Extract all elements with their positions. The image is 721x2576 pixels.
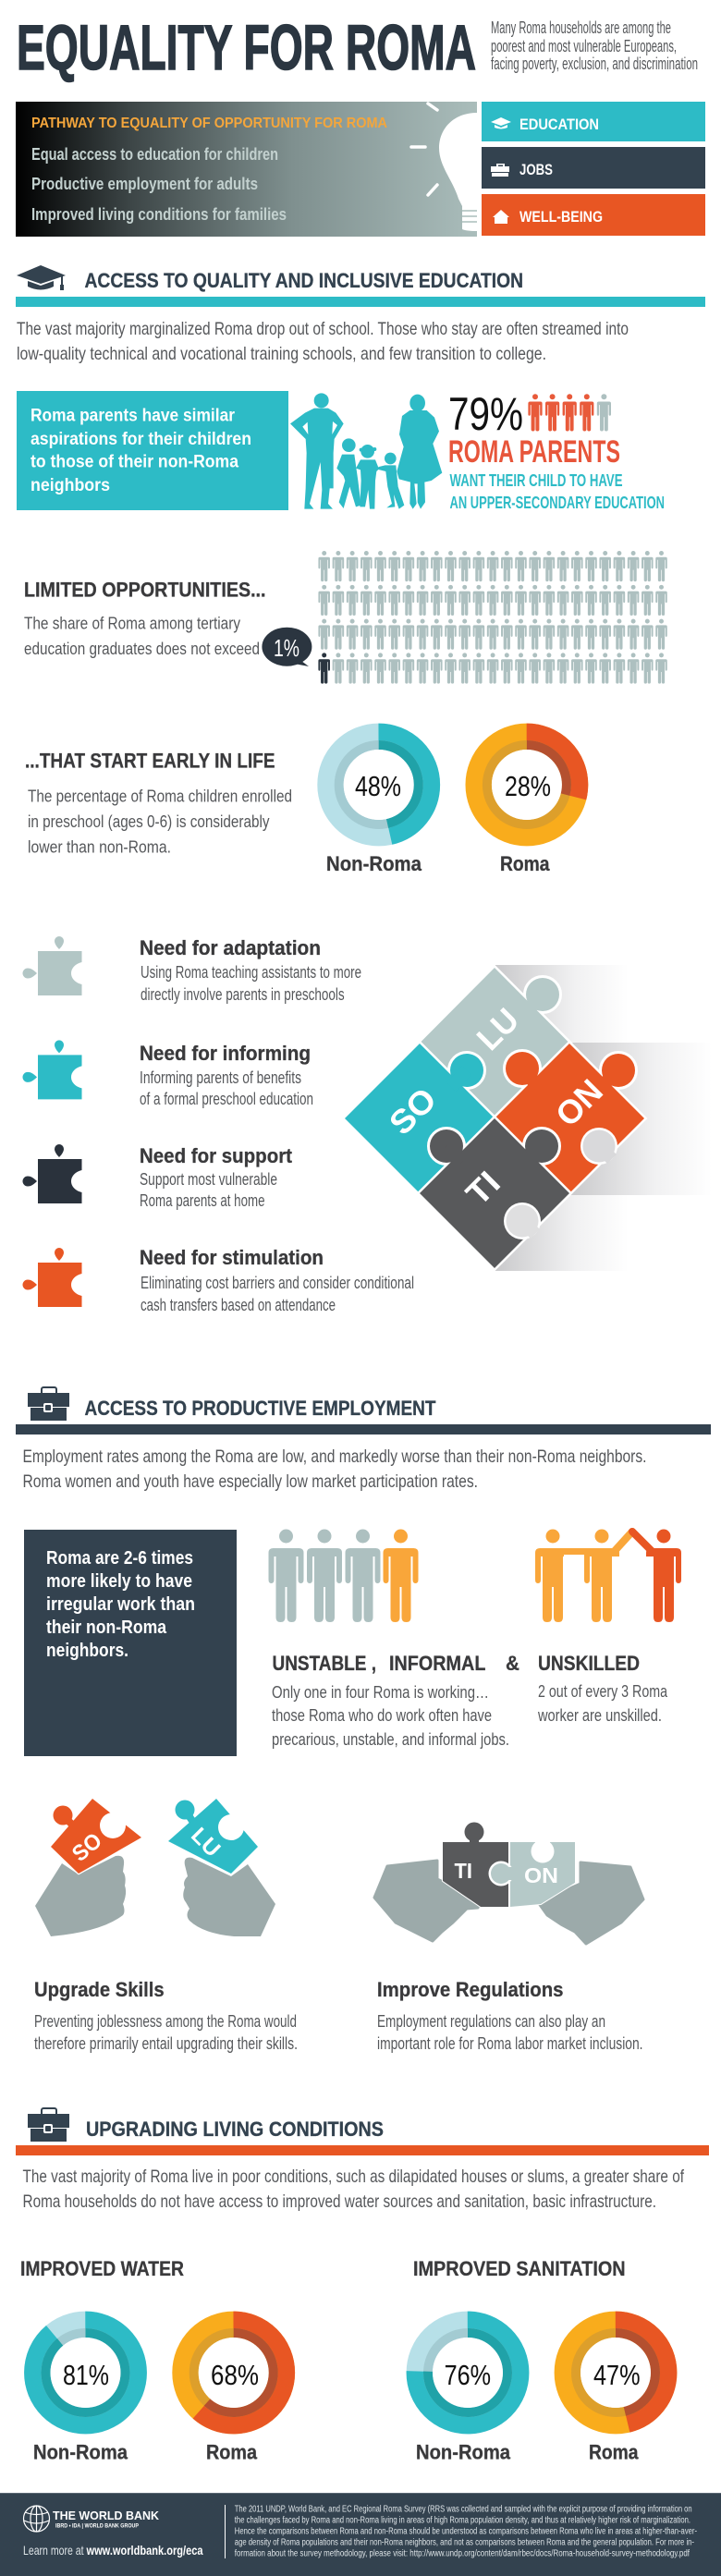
callout: 1%: 1%: [274, 634, 299, 662]
employment intro text: [22, 1447, 647, 1492]
text: tertiary share: [24, 614, 260, 658]
icon: hand holding LU piece: LU: [186, 1823, 226, 1862]
icon: world bank globe: [24, 2506, 50, 2532]
donut chart: water non-roma 81%: [37, 2325, 134, 2421]
learn more link: Learn more at: [23, 2543, 84, 2558]
text: unstable: [272, 1683, 509, 1749]
text: preschool: lower than non-Roma.: [28, 837, 171, 856]
text: preschool: in preschool (ages 0-6) is considerably: [28, 812, 270, 831]
banner list: Equal access to education for children: [31, 145, 278, 164]
icon: hand holding SO piece: [35, 1799, 141, 1936]
footer: [0, 2493, 721, 2576]
icon: hands joining TI and ON pieces: TI: [455, 1859, 472, 1883]
footnote: [235, 2505, 697, 2559]
icon: hands joining TI and ON pieces: ON: [524, 1863, 558, 1887]
text: tertiary share: education graduates does not exceed: [24, 640, 260, 658]
labels: donut groups: Roma: [206, 2441, 258, 2464]
callout: 1%: [262, 628, 312, 666]
item: need for adaptation: Using Roma teaching assistants to more: [141, 963, 361, 982]
icon: briefcase: [28, 1387, 69, 1421]
icon: hands joining TI and ON pieces: [374, 1823, 643, 1944]
button: jobs: JOBS: [519, 161, 553, 178]
text: tertiary share: The share of Roma among tertiary: [24, 614, 240, 632]
icon: house: [493, 210, 509, 224]
puzzle piece: ON: [495, 1044, 644, 1193]
text: preschool: The percentage of Roma children enrolled: [28, 787, 292, 806]
world bank logo text: IBRD • IDA | WORLD BANK GROUP: [55, 2523, 140, 2529]
puzzle: solution diamond: [345, 965, 712, 1271]
living conditions intro text: [22, 2167, 684, 2212]
icon: people 4 of 5: [528, 394, 611, 431]
stat: 79% roma parents: WANT THEIR CHILD TO HAVE: [449, 470, 623, 490]
puzzle piece: SO: [345, 1044, 495, 1193]
stat: 79% roma parents: [448, 388, 665, 512]
block: improve regulations: [377, 1978, 643, 2053]
section header: employment: [16, 1387, 711, 1435]
block: upgrade skills: [34, 1978, 298, 2053]
intro text: [491, 18, 698, 73]
puzzle piece: TI: TI: [458, 1164, 507, 1213]
icon: hand holding LU piece: [168, 1799, 275, 1936]
puzzle piece: LU: [420, 968, 569, 1118]
section header: living conditions: [16, 2108, 709, 2155]
icon: family silhouette: [290, 393, 442, 509]
icon: lightbulb: [411, 104, 477, 231]
item: need for adaptation: directly involve parents in preschools: [141, 985, 345, 1004]
donut chart: sanitation non-roma 76%: 76%: [445, 2359, 491, 2391]
block: upgrade skills: Upgrade Skills: [34, 1978, 165, 2001]
button: education: [482, 102, 705, 141]
donut chart: roma 28%: [479, 737, 575, 833]
labels: donut groups: Non-Roma: [416, 2441, 511, 2464]
text: unskilled: 2 out of every 3 Roma: [538, 1682, 668, 1701]
text: unskilled: [537, 1682, 668, 1725]
puzzle piece: TI: [420, 1118, 569, 1268]
item: need for support: Support most vulnerable: [140, 1170, 277, 1189]
panel: pathway banner: [16, 102, 477, 237]
donut chart: non-roma 48%: 48%: [355, 770, 401, 802]
label: non-roma: Non-Roma: [326, 852, 422, 875]
donut chart: sanitation non-roma 76%: [420, 2325, 516, 2421]
donut chart: water non-roma 81%: 81%: [63, 2359, 109, 2391]
item: need for support: Roma parents at home: [140, 1191, 264, 1210]
education intro text: [17, 319, 629, 364]
puzzle piece: LU: LU: [470, 1001, 526, 1057]
panel: irregular work: [24, 1530, 237, 1756]
item: need for informing: Need for informing: [140, 1042, 311, 1065]
button: education: EDUCATION: [519, 116, 599, 133]
learn more link: www.worldbank.org/eca: [86, 2543, 203, 2558]
education intro text: low-quality technical and vocational training schools, and few transition to college.: [17, 344, 546, 364]
block: improve regulations: Improve Regulations: [377, 1978, 564, 2001]
donut chart: non-roma 48%: [331, 737, 427, 833]
labels: donut groups: Non-Roma: [33, 2441, 128, 2464]
heading: start early: ...THAT START EARLY IN LIFE: [25, 749, 275, 773]
item: need for support: Need for support: [140, 1144, 293, 1167]
button: jobs: [482, 147, 705, 189]
banner list: Improved living conditions for families: [31, 205, 287, 224]
block: upgrade skills: Preventing joblessness among the Roma would: [34, 2012, 297, 2031]
panel: aspirations: neighbors: [31, 476, 110, 495]
icon: briefcase: [491, 164, 509, 177]
world bank logo text: [53, 2509, 160, 2529]
icon: hand holding SO piece: SO: [67, 1828, 107, 1867]
item: need for stimulation: Eliminating cost barriers and consider conditional: [141, 1274, 414, 1292]
item: need for informing: of a formal preschool education: [140, 1090, 313, 1108]
donut chart: water roma 68%: [185, 2325, 282, 2421]
labels: donut groups: [33, 2441, 639, 2464]
labels: unstable informal unskilled: INFORMAL: [389, 1652, 485, 1675]
button: well-being: [482, 194, 705, 236]
chart: people grid: [318, 551, 667, 684]
item: need for stimulation: Need for stimulation: [140, 1246, 324, 1269]
text: unstable: Only one in four Roma is working…: [272, 1683, 489, 1702]
panel: irregular work: irregular work than: [46, 1594, 195, 1615]
item: need for support: [22, 1144, 293, 1210]
panel: irregular work: Roma are 2-6 times: [46, 1548, 193, 1569]
item: need for stimulation: [22, 1246, 414, 1314]
item: need for adaptation: [22, 936, 361, 1004]
block: upgrade skills: therefore primarily entail upgrading their skills.: [34, 2034, 298, 2053]
labels: donut groups: Roma: [589, 2441, 639, 2464]
stat: 79% roma parents: 79%: [448, 388, 523, 440]
labels: unstable informal unskilled: UNSTABLE ,: [272, 1652, 376, 1675]
heading: improved sanitation: IMPROVED SANITATION: [413, 2257, 626, 2280]
section header: living conditions: UPGRADING LIVING CONDITIONS: [86, 2118, 384, 2141]
heading: limited opportunities: LIMITED OPPORTUNITIES...: [24, 579, 266, 602]
item: need for informing: Informing parents of benefits: [140, 1068, 301, 1087]
learn more link: [23, 2543, 203, 2558]
labels: unstable informal unskilled: UNSKILLED: [538, 1652, 640, 1675]
item: need for informing: [22, 1040, 313, 1108]
section header: education: [16, 265, 705, 307]
block: improve regulations: important role for Roma labor market inclusion.: [377, 2034, 643, 2053]
item: need for adaptation: Need for adaptation: [140, 936, 321, 959]
panel: irregular work: neighbors.: [46, 1641, 128, 1661]
panel: irregular work: more likely to have: [46, 1571, 192, 1592]
item: need for stimulation: cash transfers based on attendance: [141, 1296, 336, 1314]
icon: three linked workers: [535, 1529, 681, 1622]
panel: aspirations: Roma parents have similar: [31, 407, 236, 425]
text: unstable: precarious, unstable, and informal jobs.: [272, 1730, 509, 1749]
panel: aspirations: to those of their non-Roma: [31, 453, 238, 471]
section header: education: ACCESS TO QUALITY AND INCLUSIVE EDUCATION: [85, 269, 523, 292]
title: EQUALITY FOR ROMA: [17, 12, 476, 83]
donut chart: roma 28%: 28%: [505, 770, 551, 802]
banner heading: PATHWAY TO EQUALITY OF OPPORTUNITY FOR ROMA: [31, 116, 387, 131]
puzzle piece: ON: ON: [548, 1071, 610, 1134]
employment intro text: Roma women and youth have especially low market participation rates.: [22, 1471, 478, 1492]
world bank logo text: THE WORLD BANK: [53, 2509, 160, 2522]
icon: four workers: [268, 1529, 418, 1622]
panel: irregular work: their non-Roma: [46, 1618, 167, 1638]
label: roma: Roma: [500, 852, 550, 875]
stat: 79% roma parents: ROMA PARENTS: [448, 434, 620, 470]
banner list: [31, 145, 287, 224]
panel: aspirations: aspirations for their children: [31, 430, 251, 449]
icon: briefcase: [28, 2108, 69, 2142]
donut chart: sanitation roma 47%: [568, 2325, 664, 2421]
heading: improved water: IMPROVED WATER: [20, 2257, 184, 2280]
donut chart: water roma 68%: 68%: [211, 2359, 259, 2391]
button: well-being: WELL-BEING: [519, 208, 603, 226]
text: unskilled: worker are unskilled.: [537, 1706, 662, 1725]
section header: employment: ACCESS TO PRODUCTIVE EMPLOYMENT: [85, 1397, 436, 1420]
panel: aspirations: [17, 391, 288, 510]
donut chart: sanitation roma 47%: 47%: [593, 2359, 640, 2391]
banner list: Productive employment for adults: [31, 175, 258, 193]
labels: unstable informal unskilled: [272, 1652, 640, 1675]
block: improve regulations: Employment regulations can also play an: [377, 2012, 605, 2031]
labels: unstable informal unskilled: &: [506, 1652, 519, 1675]
icon: graduation cap: [17, 265, 66, 290]
text: preschool: [28, 787, 292, 856]
puzzle piece: SO: SO: [382, 1080, 444, 1142]
text: unstable: those Roma who do work often have: [272, 1706, 492, 1725]
icon: graduation cap: [491, 117, 511, 129]
